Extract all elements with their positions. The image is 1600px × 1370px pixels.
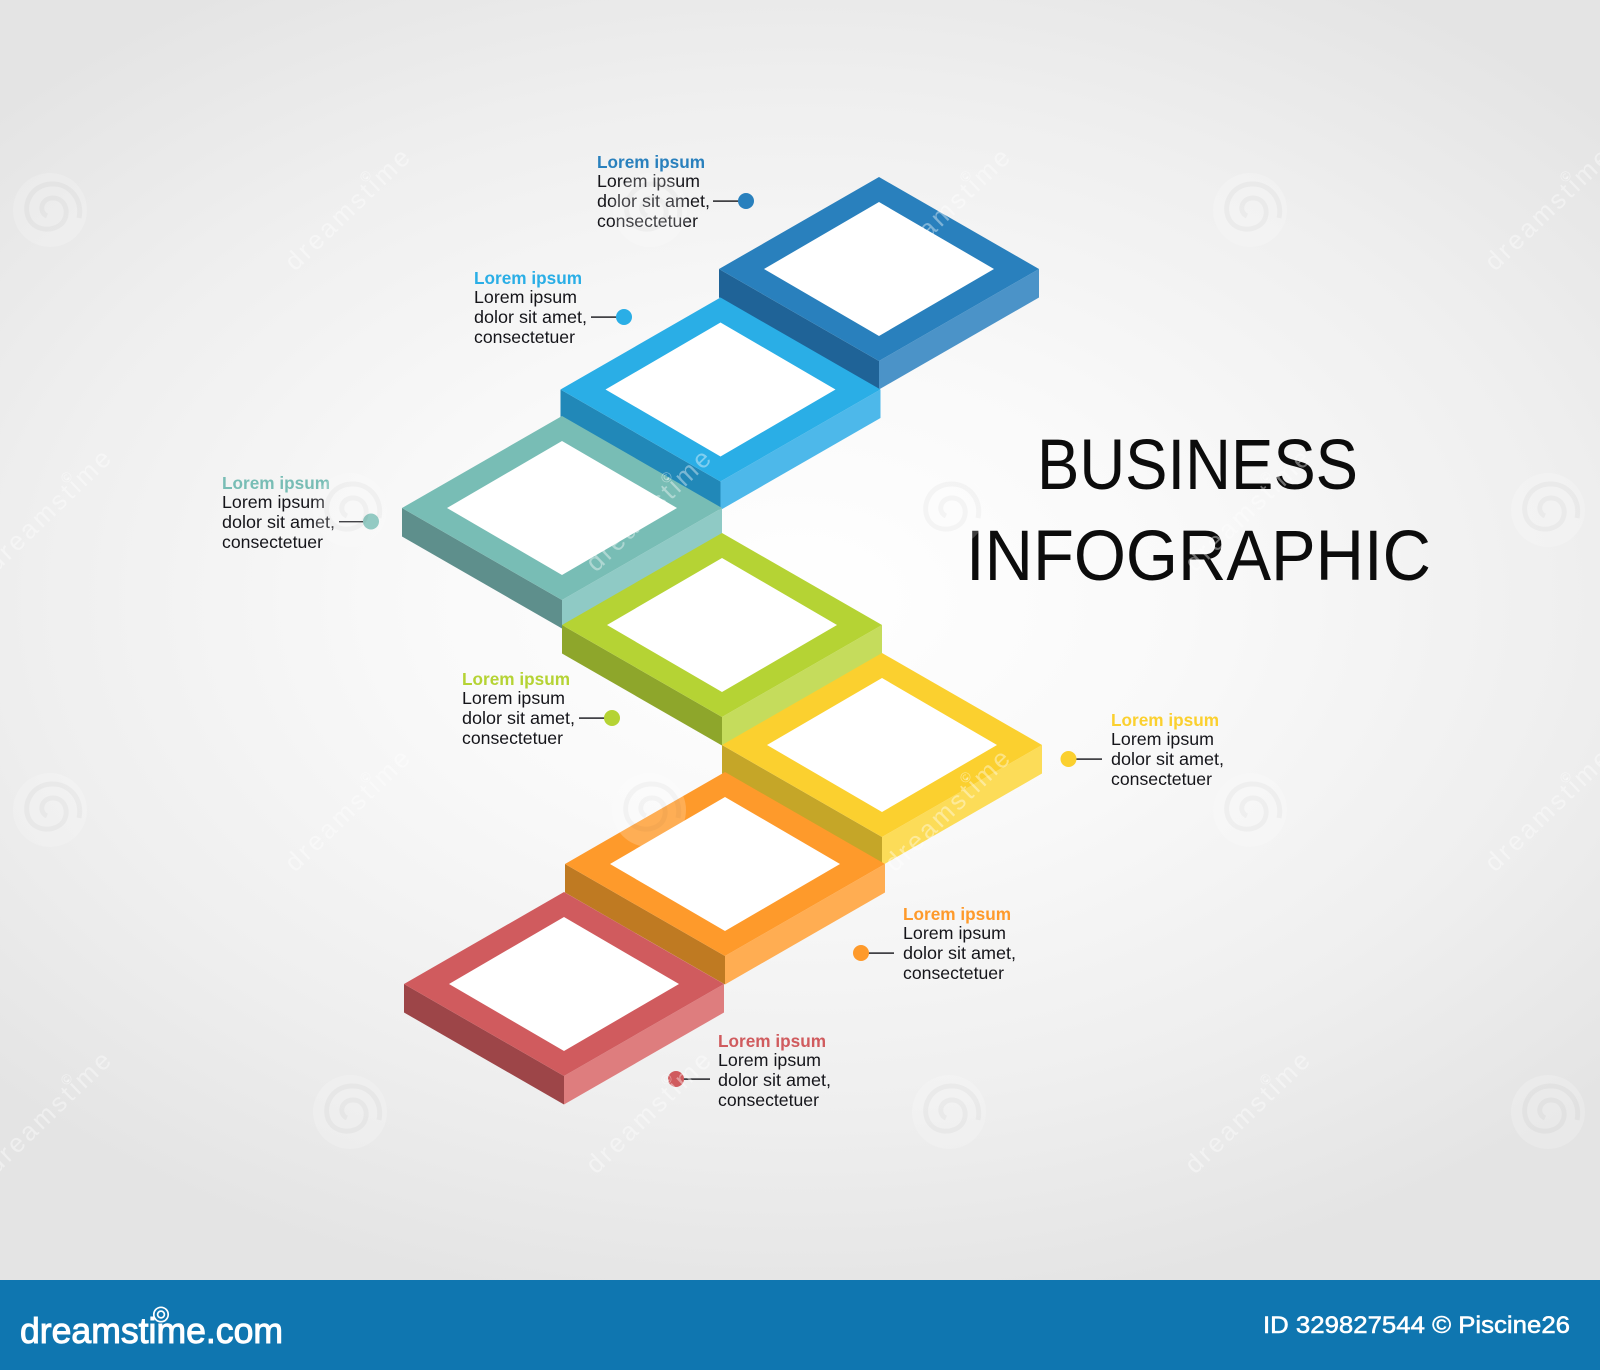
image id and credit: ID 329827544 © Piscine26 bbox=[1263, 1312, 1570, 1339]
footer bar bbox=[0, 1280, 1600, 1370]
dot bbox=[738, 193, 754, 209]
dot bbox=[363, 514, 379, 530]
heading: Lorem ipsum bbox=[474, 268, 582, 288]
top face bbox=[722, 653, 1042, 837]
heading: Lorem ipsum bbox=[718, 1031, 826, 1051]
dot bbox=[616, 309, 632, 325]
title line 1: BUSINESS bbox=[1037, 426, 1358, 505]
watermark text: © bbox=[956, 767, 975, 787]
right side face bbox=[720, 390, 880, 510]
callout 4: green bbox=[462, 669, 620, 748]
watermark text: © bbox=[956, 166, 975, 186]
watermark text: © bbox=[57, 467, 76, 487]
heading: Lorem ipsum bbox=[222, 473, 330, 493]
dot bbox=[604, 710, 620, 726]
body text: dolor sit amet, bbox=[1111, 749, 1224, 769]
body text: Lorem ipsum bbox=[222, 492, 325, 512]
top face bbox=[402, 416, 722, 600]
leader line bbox=[591, 316, 619, 318]
white panel bbox=[764, 202, 994, 336]
callout 7: red bbox=[668, 1031, 831, 1110]
body text bbox=[597, 171, 710, 231]
right side face bbox=[879, 269, 1039, 390]
body text: Lorem ipsum bbox=[903, 923, 1006, 943]
top face bbox=[565, 772, 885, 956]
left side face bbox=[562, 625, 722, 746]
block 2: light blue bbox=[560, 298, 880, 510]
body text: consectetuer bbox=[222, 532, 323, 552]
leader line bbox=[866, 952, 894, 954]
white panel bbox=[449, 917, 679, 1051]
body text: dolor sit amet, bbox=[222, 512, 335, 532]
body text: Lorem ipsum bbox=[474, 287, 577, 307]
watermark text: dreamstime bbox=[579, 443, 717, 577]
left side face bbox=[402, 508, 562, 628]
body text: consectetuer bbox=[718, 1090, 819, 1110]
right side face bbox=[725, 864, 885, 984]
body text: Lorem ipsum bbox=[462, 688, 565, 708]
watermark text: dreamstime bbox=[878, 743, 1016, 877]
top face bbox=[719, 177, 1039, 361]
body text: Lorem ipsum bbox=[1111, 729, 1214, 749]
block 6: orange bbox=[565, 772, 885, 984]
dot bbox=[853, 945, 869, 961]
heading: Lorem ipsum bbox=[1111, 710, 1219, 730]
body text bbox=[718, 1050, 831, 1110]
watermark text: © bbox=[1256, 1069, 1275, 1089]
left side face bbox=[719, 269, 879, 390]
body text: Lorem ipsum bbox=[718, 1050, 821, 1070]
icon: swirl bbox=[154, 1307, 168, 1322]
watermark text: © bbox=[657, 1069, 676, 1089]
leader line bbox=[681, 1078, 710, 1080]
block 7: red bbox=[404, 892, 724, 1104]
left side face bbox=[404, 984, 564, 1104]
watermark text: © bbox=[1556, 767, 1575, 787]
leader line bbox=[1073, 758, 1102, 760]
right side face bbox=[882, 745, 1042, 866]
body text: consectetuer bbox=[1111, 769, 1212, 789]
watermark text: dreamstime bbox=[579, 1045, 717, 1179]
body text: consectetuer bbox=[597, 211, 698, 231]
watermark text: © bbox=[657, 467, 676, 487]
heading: Lorem ipsum bbox=[462, 669, 570, 689]
body text: dolor sit amet, bbox=[718, 1070, 831, 1090]
white panel bbox=[767, 678, 997, 812]
body text: dolor sit amet, bbox=[462, 708, 575, 728]
white panel bbox=[606, 322, 836, 456]
leader line bbox=[339, 521, 367, 522]
watermark text: © bbox=[1556, 166, 1575, 186]
body text bbox=[462, 688, 575, 748]
white panel bbox=[610, 797, 840, 931]
title bbox=[966, 426, 1431, 596]
body text: consectetuer bbox=[903, 963, 1004, 983]
watermark text: dreamstime bbox=[878, 142, 1016, 276]
watermark text: dreamstime bbox=[278, 142, 416, 276]
heading: Lorem ipsum bbox=[903, 904, 1011, 924]
heading: Lorem ipsum bbox=[597, 152, 705, 172]
body text bbox=[1111, 729, 1224, 789]
block 5: yellow bbox=[722, 653, 1042, 866]
top face bbox=[404, 892, 724, 1076]
body text bbox=[474, 287, 587, 347]
watermark text bbox=[0, 139, 1600, 1179]
callout 1: dark blue bbox=[597, 152, 754, 231]
callout 2: light blue bbox=[474, 268, 632, 347]
right side face bbox=[722, 625, 882, 746]
dot bbox=[668, 1071, 684, 1087]
leader line bbox=[579, 717, 607, 719]
top face bbox=[560, 298, 880, 482]
left side face bbox=[722, 745, 882, 866]
watermark text: © bbox=[356, 767, 375, 787]
dot bbox=[1060, 751, 1076, 767]
body text: consectetuer bbox=[462, 728, 563, 748]
body text bbox=[903, 923, 1016, 983]
footer logo: dreamstime.com bbox=[20, 1310, 283, 1351]
block 4: green bbox=[562, 533, 882, 746]
right side face bbox=[564, 984, 724, 1104]
white panel bbox=[447, 441, 677, 575]
watermark text: © bbox=[356, 166, 375, 186]
callout 6: orange bbox=[853, 904, 1016, 983]
right side face bbox=[562, 508, 722, 628]
watermark text: © bbox=[57, 1069, 76, 1089]
callout 5: yellow bbox=[1060, 710, 1224, 789]
top face bbox=[562, 533, 882, 717]
watermark swirls bbox=[13, 173, 1585, 1149]
body text bbox=[222, 492, 335, 552]
body text: Lorem ipsum bbox=[597, 171, 700, 191]
body text: dolor sit amet, bbox=[903, 943, 1016, 963]
leader line bbox=[713, 200, 741, 202]
left side face bbox=[560, 390, 720, 510]
watermark text: dreamstime bbox=[278, 743, 416, 877]
body text: consectetuer bbox=[474, 327, 575, 347]
white panel bbox=[607, 558, 837, 692]
watermark text: dreamstime bbox=[1178, 443, 1316, 577]
callout 3: teal bbox=[222, 473, 379, 552]
title line 2: INFOGRAPHIC bbox=[966, 517, 1431, 596]
block 3: teal bbox=[402, 416, 722, 628]
body text: dolor sit amet, bbox=[597, 191, 710, 211]
left side face bbox=[565, 864, 725, 984]
block 1: dark blue bbox=[719, 177, 1039, 390]
watermark text: dreamstime bbox=[1178, 1045, 1316, 1179]
body text: dolor sit amet, bbox=[474, 307, 587, 327]
watermark text: © bbox=[1256, 467, 1275, 487]
